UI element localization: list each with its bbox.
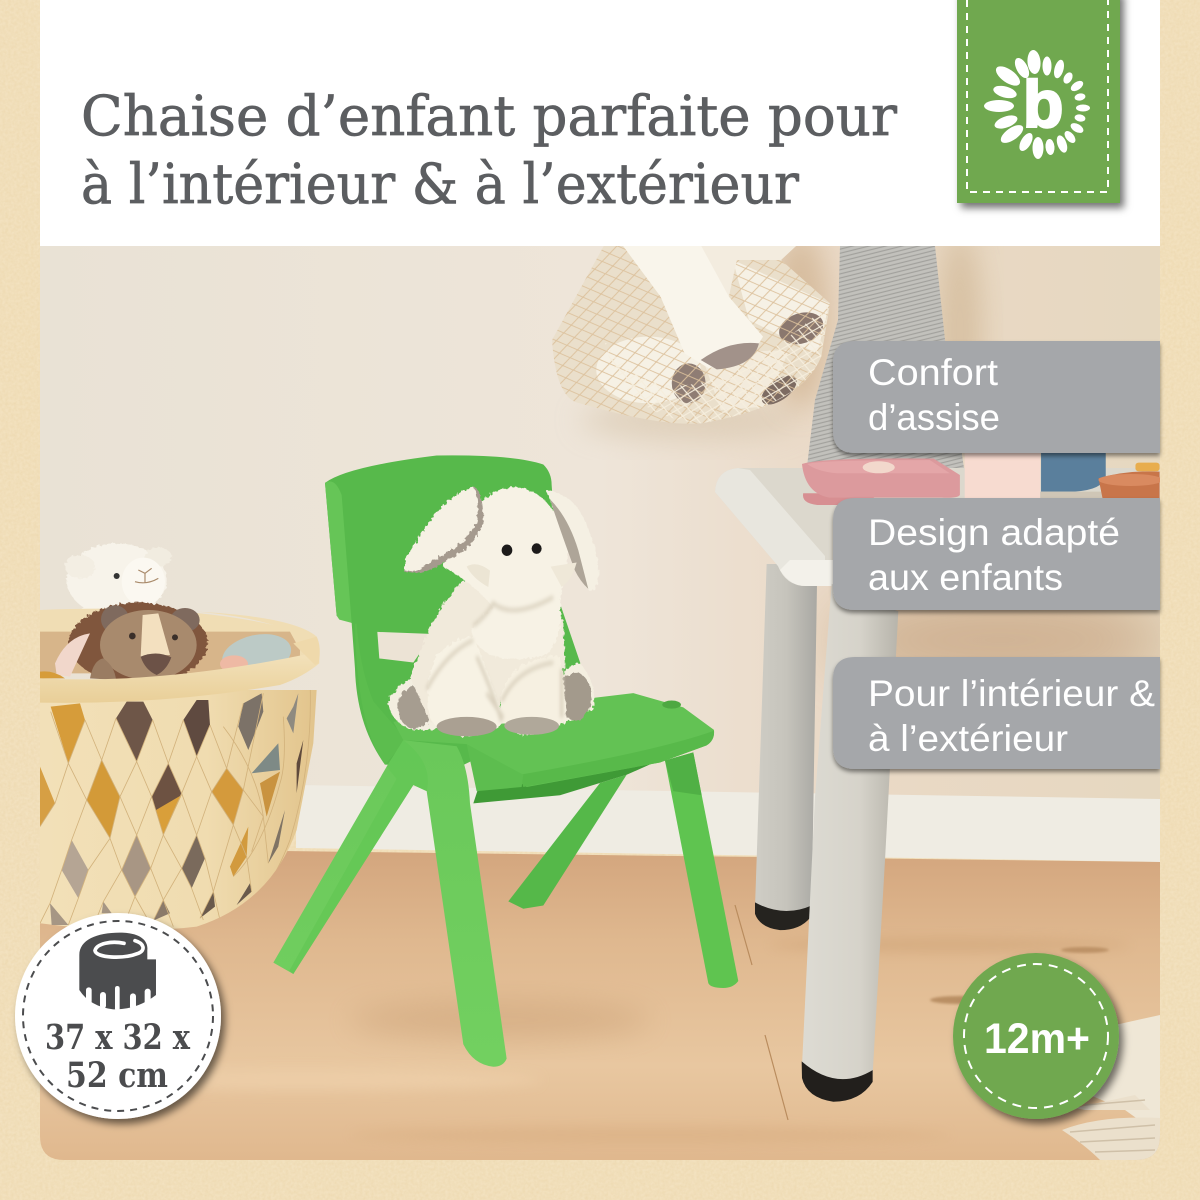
basket body with woven holes bbox=[40, 690, 317, 930]
table top bbox=[715, 468, 1160, 586]
rug fringe bbox=[1062, 1015, 1160, 1160]
lion plush bbox=[69, 603, 208, 684]
badge: age 12 months plus bbox=[953, 953, 1119, 1119]
front legs bbox=[470, 756, 522, 792]
backrest bbox=[325, 455, 593, 767]
callout: seating comfort: d’assise bbox=[868, 397, 1000, 438]
callout: seating comfort: Confort bbox=[868, 352, 999, 393]
badge: dimensions: 52 cm bbox=[66, 1055, 168, 1096]
table front leg bbox=[802, 584, 898, 1102]
plush elephant bbox=[388, 487, 599, 736]
backrest hand hole bbox=[377, 632, 433, 663]
logo sunburst bbox=[984, 49, 1090, 159]
callout: indoor and outdoor: Pour l’intérieur & bbox=[868, 673, 1155, 714]
table back leg bbox=[755, 564, 817, 930]
header white band bbox=[40, 0, 1160, 246]
basket back rim bbox=[40, 608, 306, 656]
elephant eyes bbox=[502, 545, 512, 556]
chair shadow bbox=[350, 1000, 650, 1040]
icon: measuring tape roll bbox=[79, 933, 156, 1011]
panel: room photo bbox=[40, 230, 1170, 1160]
green child chair bbox=[273, 455, 738, 1067]
title: à l’intérieur & à l’extérieur bbox=[81, 152, 800, 216]
title: Chaise d’enfant parfaite pour bbox=[81, 84, 898, 148]
elephant body bbox=[410, 579, 565, 722]
towel bbox=[806, 246, 965, 475]
elephant ears bbox=[404, 487, 483, 574]
back right leg bbox=[508, 775, 627, 909]
callout: child-friendly design: aux enfants bbox=[868, 557, 1063, 598]
net bag with plush toy bbox=[552, 245, 830, 424]
callout: indoor and outdoor: à l’extérieur bbox=[868, 718, 1068, 759]
blue bird plush bbox=[222, 634, 292, 665]
callout: seating comfort bbox=[833, 341, 1160, 453]
callout: indoor and outdoor bbox=[833, 657, 1160, 769]
baseboard bbox=[296, 785, 1160, 862]
elephant tusks bbox=[551, 562, 577, 587]
elephant head and trunk bbox=[443, 487, 568, 659]
elephant side feet bbox=[558, 664, 595, 721]
logo tag bbox=[957, 0, 1120, 203]
basket with toys bbox=[40, 543, 320, 930]
seat underside bbox=[473, 764, 651, 804]
wall bbox=[40, 246, 1160, 806]
logo letter: b bbox=[1023, 67, 1063, 141]
badge: age 12 months plus: 12m+ bbox=[984, 1015, 1090, 1063]
badge: dimensions bbox=[15, 913, 221, 1119]
seat bbox=[393, 693, 714, 787]
callout: child-friendly design bbox=[833, 498, 1160, 610]
elephant shading bbox=[427, 597, 562, 722]
basket front rim bbox=[40, 652, 319, 703]
basket weave edges bbox=[40, 680, 310, 927]
callout: child-friendly design: Design adapté bbox=[868, 512, 1120, 553]
title bbox=[81, 84, 898, 216]
dimensions text: 37 x 32 x bbox=[45, 1017, 191, 1058]
table items: plate, cup, bowl bbox=[802, 452, 1163, 505]
lamb plush bbox=[64, 542, 172, 674]
wood floor bbox=[40, 848, 1160, 1160]
